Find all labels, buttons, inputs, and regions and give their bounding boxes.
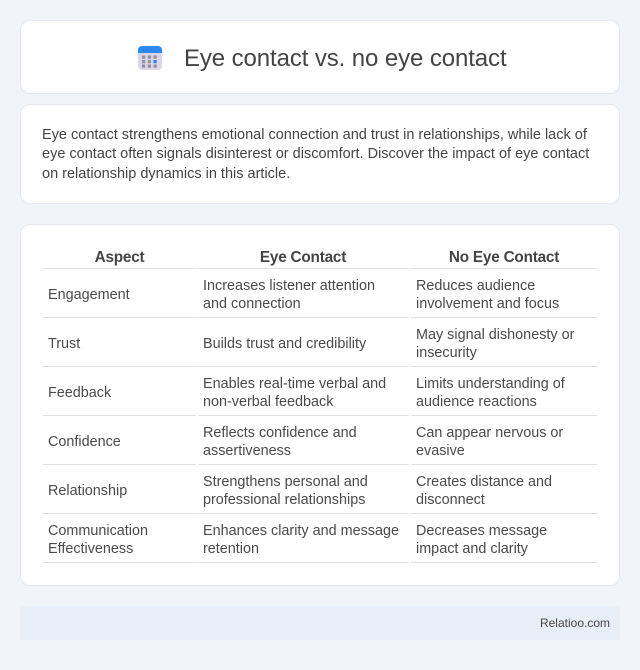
row: Feedback: Enables real-time verbal and <box>203 376 386 392</box>
intro text <box>42 127 590 182</box>
column header: Eye Contact: Eye Contact <box>260 249 346 266</box>
row: Relationship: Creates distance and <box>416 474 552 490</box>
row: Engagement: Increases listener attention <box>203 278 375 294</box>
row: Engagement: and connection <box>203 296 301 312</box>
intro text: Eye contact strengthens emotional connection and trust in relationships, while lack of <box>42 127 587 143</box>
icon: calendar <box>138 46 162 70</box>
row: Communication Effectiveness: retention <box>203 541 259 557</box>
row: Trust: Trust <box>48 336 80 352</box>
title: Eye contact vs. no eye contact <box>184 45 507 72</box>
column header: No Eye Contact: No Eye Contact <box>449 249 559 266</box>
intro text: eye contact often signals disinterest or discomfort. Discover the impact of eye contact <box>42 146 589 162</box>
panel: title card <box>20 20 620 94</box>
row: Confidence: Confidence <box>48 434 121 450</box>
row: Trust: Builds trust and credibility <box>203 336 366 352</box>
row: Feedback <box>48 376 565 410</box>
row: Feedback: non-verbal feedback <box>203 394 333 410</box>
panel: comparison table <box>20 224 620 586</box>
row: Relationship: Relationship <box>48 483 127 499</box>
row: Confidence: evasive <box>416 443 465 459</box>
row: Relationship <box>48 474 552 508</box>
row: Engagement <box>48 278 559 312</box>
row: Relationship: professional relationships <box>203 492 365 508</box>
intro text: on relationship dynamics in this article. <box>42 166 290 182</box>
row: Feedback: audience reactions <box>416 394 537 410</box>
row: Relationship: disconnect <box>416 492 485 508</box>
row: Confidence <box>48 425 563 459</box>
row: Communication Effectiveness: Decreases message <box>416 523 547 539</box>
row: Confidence: Can appear nervous or <box>416 425 563 441</box>
row: Confidence: assertiveness <box>203 443 291 459</box>
row: Communication Effectiveness: impact and clarity <box>416 541 528 557</box>
row: Feedback: Feedback <box>48 385 111 401</box>
footer text: Relatioo.com <box>540 616 610 630</box>
panel: introduction <box>20 104 620 204</box>
row: Relationship: Strengthens personal and <box>203 474 368 490</box>
footer bar <box>20 606 620 640</box>
row: Engagement: Reduces audience <box>416 278 535 294</box>
row: Trust: insecurity <box>416 345 477 361</box>
row: Engagement: Engagement <box>48 287 130 303</box>
row: Confidence: Reflects confidence and <box>203 425 357 441</box>
row: Trust <box>48 327 574 361</box>
row: Communication Effectiveness <box>48 523 547 557</box>
row: Communication Effectiveness: Communication <box>48 523 148 539</box>
column header: Aspect: Aspect <box>95 249 144 266</box>
row: Communication Effectiveness: Effectiveness <box>48 541 133 557</box>
row: Communication Effectiveness: Enhances clarity and message <box>203 523 399 539</box>
row: Engagement: involvement and focus <box>416 296 559 312</box>
row: Feedback: Limits understanding of <box>416 376 565 392</box>
row: Trust: May signal dishonesty or <box>416 327 574 343</box>
